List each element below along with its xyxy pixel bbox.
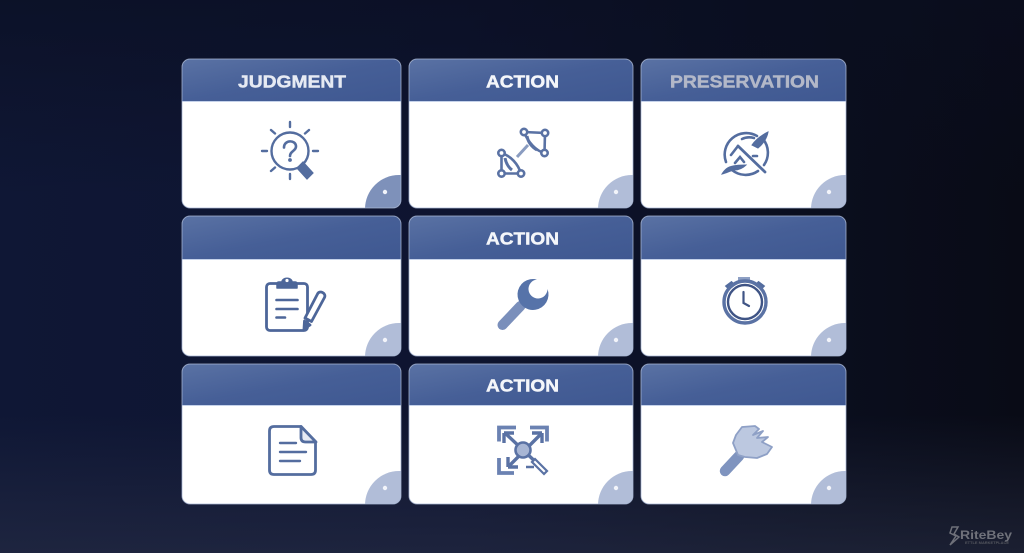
corner badge <box>598 471 633 504</box>
icon: clipboard and pencil <box>266 278 325 330</box>
corner badge <box>811 323 846 356</box>
icon: expand focus <box>499 428 547 474</box>
icon: question mark magnifier with rays <box>262 122 318 179</box>
watermark logo: ETTLE MARKETPLACE <box>965 541 1010 545</box>
corner badge <box>811 471 846 504</box>
icon: linked nodes <box>498 129 548 177</box>
corner badge <box>365 471 401 504</box>
panel: action card 2 <box>409 216 633 356</box>
corner badge <box>598 323 633 356</box>
corner badge <box>811 175 846 208</box>
heading: preservation: PRESERVATION <box>670 72 819 92</box>
panel: preservation card <box>641 59 846 208</box>
panel: stopwatch card <box>641 216 846 356</box>
heading: action: ACTION <box>486 376 559 396</box>
heading: judgment: JUDGMENT <box>238 72 346 92</box>
icon: fork wrench <box>725 426 772 471</box>
panel: action card 3 <box>409 364 633 504</box>
panel: fork wrench card <box>641 364 846 504</box>
corner badge <box>365 175 401 208</box>
icon: stopwatch <box>724 277 766 323</box>
corner badge <box>365 323 401 356</box>
panel: judgment card <box>182 59 401 208</box>
watermark logo <box>950 527 1013 545</box>
panel: clipboard card <box>182 216 401 356</box>
icon: crossed compass circle <box>722 132 768 175</box>
watermark logo: RiteBey <box>960 530 1013 542</box>
icon: wrench <box>502 279 548 325</box>
panel: document card <box>182 364 401 504</box>
panel: action card 1 <box>409 59 633 208</box>
corner badge <box>598 175 633 208</box>
heading: action: ACTION <box>486 228 559 248</box>
icon: document <box>270 426 316 474</box>
heading: action: ACTION <box>486 72 559 92</box>
